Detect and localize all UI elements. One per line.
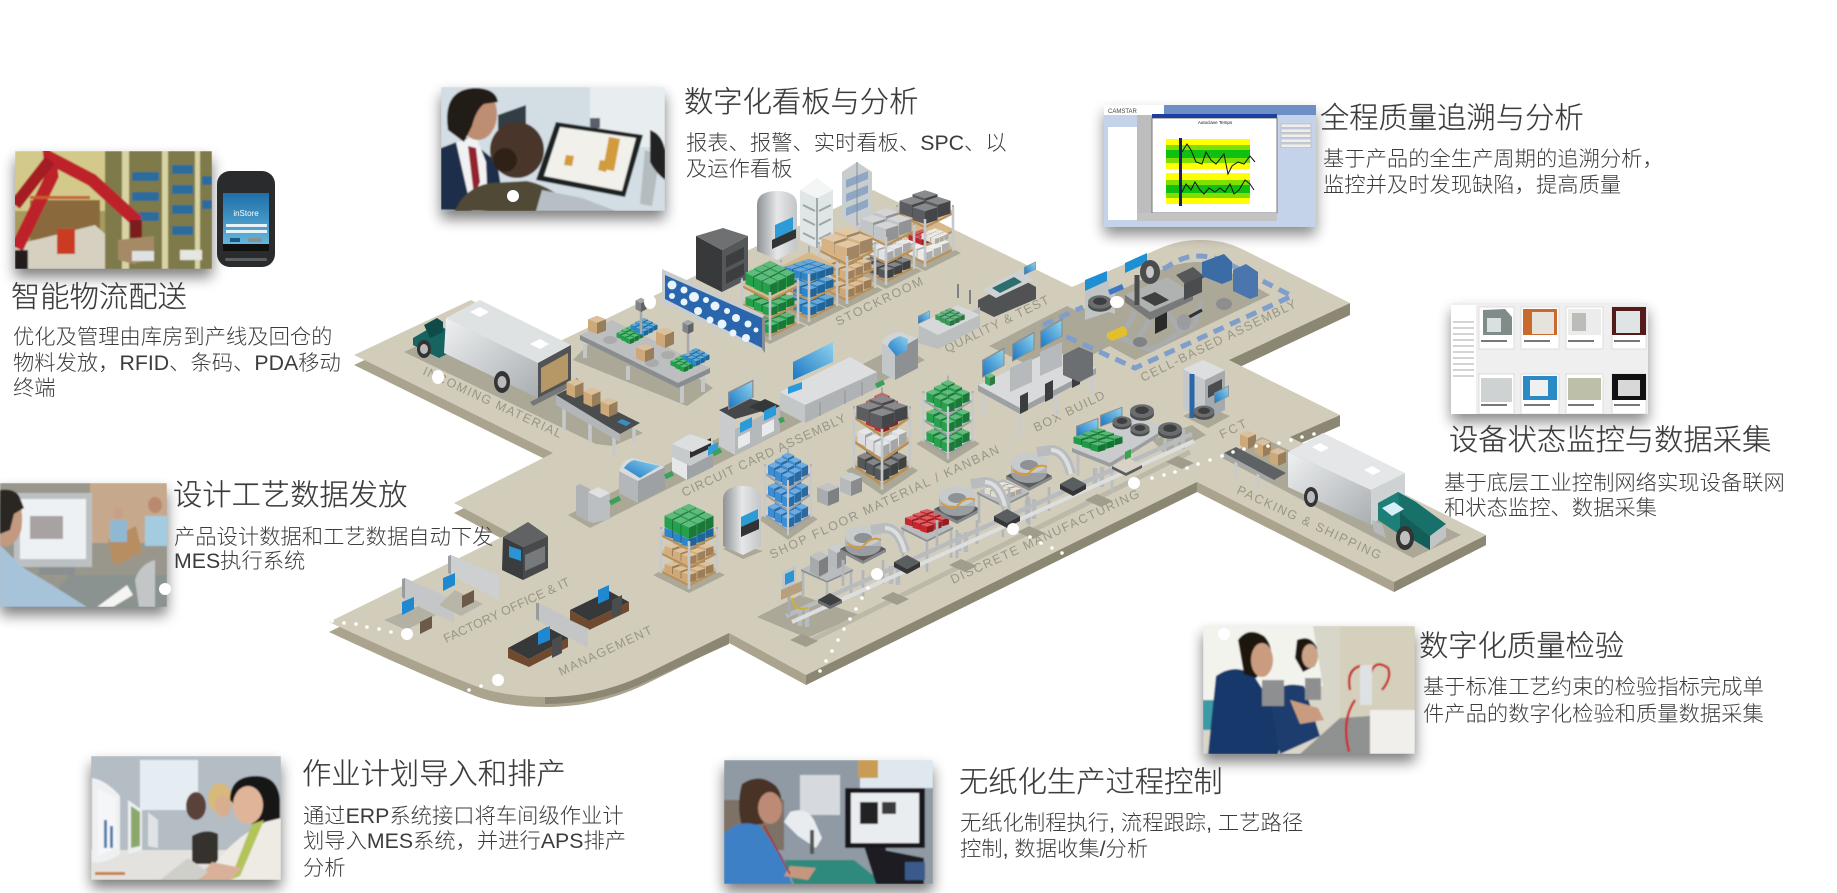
photo: two people at monitor (441, 87, 665, 219)
shipping truck (1288, 433, 1446, 550)
connector dots (330, 202, 1316, 692)
panel: design data release (0, 479, 493, 615)
management desks (508, 585, 629, 667)
heading: 智能物流配送 (11, 281, 187, 314)
floor labels: DISCRETE MANUFACTURING (948, 487, 1142, 587)
white rack (800, 178, 833, 248)
description: 件产品的数字化检验和质量数据采集 (1423, 702, 1764, 726)
description: 控制, 数据收集/分析 (960, 837, 1148, 861)
description: 划导入MES系统，并进行APS排产 (303, 829, 626, 853)
photo: robot arm warehouse (15, 151, 212, 277)
photo: technician at microscope (724, 760, 933, 892)
cell based assembly cell (1085, 253, 1258, 350)
heading: 设备状态监控与数据采集 (1449, 424, 1771, 457)
floor labels: BOX BUILD (1031, 388, 1107, 435)
shop floor shelves (653, 376, 980, 593)
heading: 作业计划导入和排产 (302, 758, 566, 791)
description: 产品设计数据和工艺数据自动下发 (174, 525, 493, 549)
photo: operators at workstations (91, 756, 281, 888)
panel: paperless process control (724, 760, 1303, 892)
floor labels: STOCKROOM (833, 274, 926, 329)
panel: digital kanban (441, 86, 1007, 219)
description: 基于标准工艺约束的检验指标完成单 (1423, 675, 1764, 699)
factory floor plan (329, 162, 1486, 707)
machine: reflow oven (780, 357, 877, 423)
panel: equipment monitoring (1444, 303, 1785, 520)
description: 和状态监控、数据采集 (1444, 496, 1657, 520)
description: MES执行系统 (174, 549, 305, 573)
panel: digital quality inspection (1203, 626, 1764, 762)
photo: SPC chart screenshot: Autoclave Temps (1198, 120, 1233, 125)
heading: 数字化质量检验 (1419, 630, 1624, 663)
floor labels: CELL-BASED ASSEMBLY (1138, 297, 1299, 385)
floor top surface (329, 190, 1486, 697)
packing conveyor (1224, 431, 1286, 488)
blue parts rack (842, 162, 872, 227)
factory office cubicles (384, 522, 548, 634)
kiosk stockroom (757, 191, 797, 260)
machine: pick and place pair (719, 398, 780, 455)
machine: screen printer (619, 458, 665, 503)
description: 及运作看板 (686, 157, 792, 181)
discrete manufacturing line (781, 404, 1194, 647)
machine: AOI unit (882, 332, 918, 380)
incoming truck (413, 300, 580, 406)
description: 基于底层工业控制网络实现设备联网 (1444, 471, 1785, 495)
photo: SPC chart screenshot (1104, 105, 1316, 235)
heading: 全程质量追溯与分析 (1320, 102, 1584, 135)
machine: board handler (576, 484, 610, 523)
server cabinet (696, 228, 748, 292)
description: 监控并及时发现缺陷，提高质量 (1323, 173, 1621, 197)
operator panel and trays (781, 449, 1142, 615)
floor labels: CIRCUIT CARD ASSEMBLY (679, 411, 849, 500)
description: 优化及管理由库房到产线及回仓的 (13, 325, 332, 349)
photo: operator at terminal (0, 483, 171, 615)
kanban board (662, 269, 765, 353)
floor labels: MANAGEMENT (556, 623, 655, 679)
icon: handheld PDA (217, 171, 275, 267)
conveyors (610, 382, 884, 503)
description: 分析 (303, 856, 346, 880)
quality and test stations (918, 261, 1036, 349)
description: 基于产品的全生产周期的追溯分析， (1323, 147, 1664, 171)
photo: machine status grid (1451, 303, 1648, 422)
heading: 数字化看板与分析 (684, 86, 918, 119)
photo: lab inspectors (1203, 626, 1415, 762)
description: 通过ERP系统接口将车间级作业计 (303, 804, 624, 828)
machine: SPI inspection (672, 434, 718, 480)
icon: handheld PDA: inStore (233, 209, 259, 218)
heading: 设计工艺数据发放 (173, 479, 407, 512)
floor labels: SHOP FLOOR MATERIAL / KANBAN (767, 443, 1002, 562)
floor labels: QUALITY & TEST (942, 293, 1052, 356)
receiving bench (580, 298, 710, 403)
description: 终端 (13, 376, 56, 400)
description: 物料发放，RFID、条码、PDA移动 (13, 351, 341, 375)
photo: SPC chart screenshot: CAMSTAR (1108, 109, 1138, 115)
stations behind conveyor (801, 404, 1182, 610)
floor labels: INCOMING MATERIAL (421, 364, 564, 441)
dark slab faces (545, 303, 1486, 704)
stockroom shelves (734, 190, 961, 344)
floor shadows (404, 262, 1461, 638)
panel: production planning (91, 756, 626, 888)
incoming conveyor (556, 378, 640, 456)
zone dashed outline (1043, 256, 1292, 368)
description: 无纸化制程执行, 流程跟踪, 工艺路径 (960, 811, 1303, 835)
floor labels: FACTORY OFFICE & IT (441, 575, 572, 646)
box build bench (978, 318, 1096, 436)
floor labels: FCT (1217, 416, 1249, 442)
functional test station (1183, 360, 1230, 428)
circuit card assembly line (576, 332, 918, 523)
heading: 无纸化生产过程控制 (959, 766, 1223, 799)
floor slab side (329, 200, 1486, 707)
panel: quality traceability (1104, 102, 1664, 235)
description: 报表、报警、实时看板、SPC、以 (686, 131, 1007, 155)
floor labels: PACKING & SHIPPING (1235, 483, 1384, 562)
floor labels (421, 274, 1384, 679)
panel: smart logistics (11, 151, 341, 400)
